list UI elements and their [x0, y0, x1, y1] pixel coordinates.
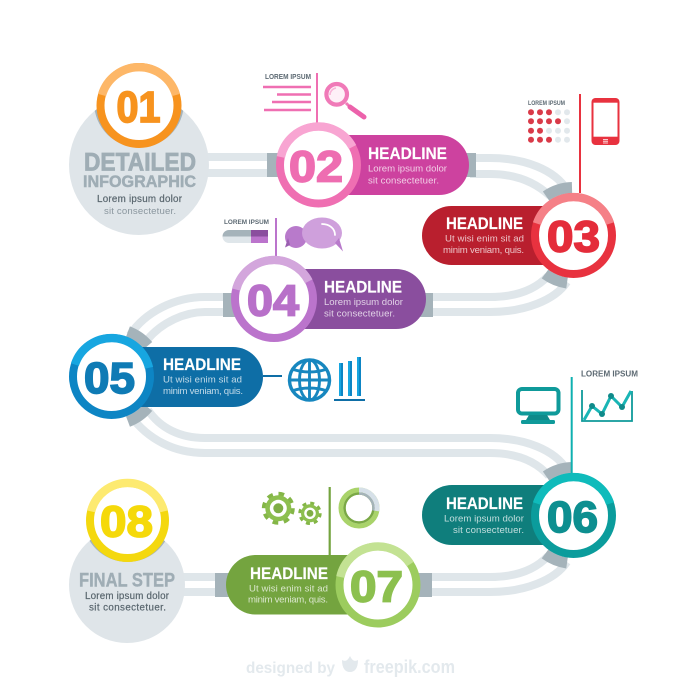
step 05: Ut wisi enim sit ad [163, 375, 242, 386]
step 02 [280, 126, 469, 204]
panel: finish, final step: FINAL STEP [79, 571, 175, 592]
panel: start, detailed infographic: INFOGRAPHIC [83, 172, 196, 191]
winding road track [128, 153, 572, 597]
step 07 [226, 546, 416, 624]
icon group: dot matrix and phone [528, 94, 620, 193]
step 06 [422, 477, 612, 554]
step 03: HEADLINE [446, 215, 523, 233]
panel: start, detailed infographic: Lorem ipsum dolor [97, 194, 183, 205]
icon group: progress bar and speech bubbles: LOREM IPSUM [224, 219, 269, 226]
panel: start, detailed infographic: DETAILED [84, 149, 196, 177]
footer credit: freepik.com [364, 657, 455, 677]
step 04: 04 [247, 276, 300, 326]
icon group: monitor and line chart [518, 370, 638, 473]
icon group: monitor and line chart: LOREM IPSUM [581, 370, 638, 379]
panel: finish, final step: sit consectetuer. [89, 603, 166, 614]
step 06: 06 [547, 493, 598, 542]
step 07: 07 [350, 562, 403, 612]
step 04: Lorem ipsum dolor [324, 297, 404, 308]
step 06: HEADLINE [446, 495, 523, 513]
step 06: sit consectetuer. [453, 525, 524, 536]
panel: finish, final step: 08 [100, 498, 153, 546]
step 03 [422, 197, 612, 274]
icon group: dot matrix and phone: LOREM IPSUM [528, 101, 565, 107]
panel: start, detailed infographic [69, 58, 209, 235]
panel: start, detailed infographic: sit consectetuer. [104, 206, 176, 217]
icon group: globe and bar chart [289, 357, 365, 400]
footer credit: designed by [246, 660, 335, 677]
step 02: Lorem ipsum dolor [368, 164, 448, 174]
step 05: HEADLINE [163, 356, 241, 374]
step 07: HEADLINE [250, 565, 328, 583]
step 04 [235, 260, 426, 338]
step 07: Ut wisi enim sit ad [249, 584, 328, 595]
step 05 [73, 338, 282, 415]
step 05: 05 [84, 354, 135, 403]
panel: finish, final step [69, 473, 185, 643]
step 03: Ut wisi enim sit ad [445, 234, 524, 245]
icon group: text lines and magnifier [263, 73, 364, 125]
step 07: minim veniam, quis. [248, 595, 328, 606]
step 02: HEADLINE [368, 145, 447, 163]
footer credit [246, 656, 455, 677]
step 02: 02 [289, 142, 343, 192]
icon group: text lines and magnifier: LOREM IPSUM [265, 74, 311, 81]
step 04: HEADLINE [324, 279, 402, 297]
step 04: sit consectetuer. [324, 309, 395, 320]
panel: start, detailed infographic: 01 [116, 83, 160, 132]
icon group: progress bar and speech bubbles [222, 218, 343, 257]
step 06: Lorem ipsum dolor [444, 514, 525, 525]
step 05: minim veniam, quis. [163, 386, 243, 397]
panel: finish, final step: Lorem ipsum dolor [85, 591, 170, 602]
icon group: gears and donut [264, 487, 377, 556]
step 03: 03 [547, 212, 600, 262]
step 02: sit consectetuer. [368, 176, 439, 186]
step 03: minim veniam, quis. [443, 245, 524, 256]
